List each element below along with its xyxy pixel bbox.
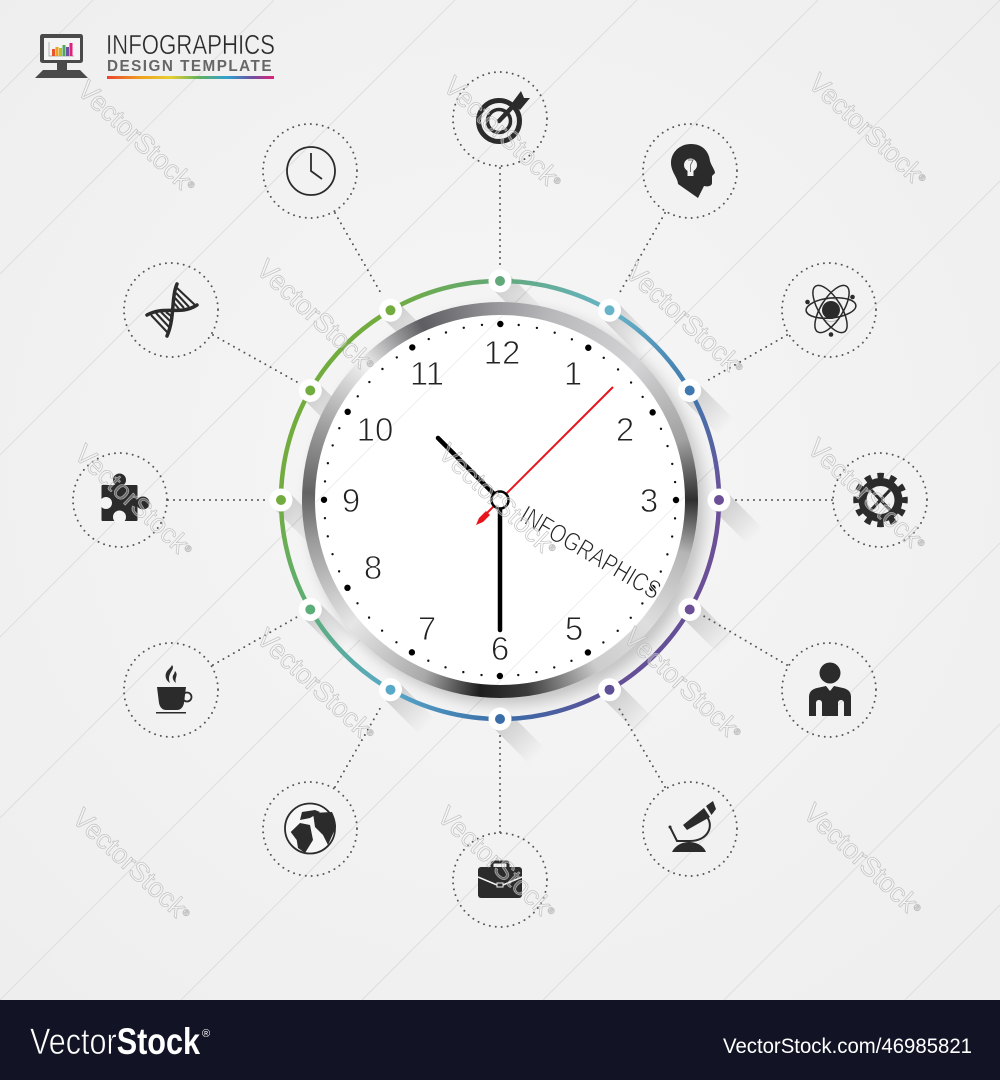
watermarks: ® [546,542,558,554]
watermarks: ® [916,172,928,184]
watermarks: VectorStock [620,257,745,377]
dotted connectors [168,168,832,832]
watermarks: ® [180,907,192,919]
clock numerals: 7 [418,610,436,647]
footer image id: VectorStock.com/46985821 [723,1035,972,1058]
clock numerals: 8 [364,549,382,586]
watermarks: ® [185,179,197,191]
clock numerals: 5 [565,610,583,647]
icon: gear [856,476,904,524]
clock numerals: 9 [342,482,360,519]
watermarks: ® [182,543,194,555]
clock numerals [342,334,658,667]
centre pin [492,492,508,508]
watermarks: ® [551,175,563,187]
hour hand [438,438,500,500]
watermarks: VectorStock [432,801,557,921]
clock numerals: 3 [640,482,658,519]
icon: globe [285,804,336,854]
clock numerals: 6 [491,630,509,667]
watermarks: VectorStock [72,75,197,195]
second hand [476,387,613,525]
icon: dna helix [147,284,197,336]
icon: businessman [809,662,851,716]
watermarks [67,68,934,928]
watermarks: VectorStock [433,438,558,558]
watermarks: ® [545,905,557,917]
icon: head with bulb [671,144,715,198]
watermarks: ® [364,358,376,370]
logo title: INFOGRAPHICS [106,29,275,60]
clock numerals: 10 [357,411,393,448]
watermarks: VectorStock [251,623,376,743]
icon: microscope [668,801,716,852]
clock face disc [315,315,685,685]
watermarks: VectorStock [802,433,927,553]
watermarks: VectorStock [67,803,192,923]
watermarks: VectorStock [251,254,376,374]
hour ticks [324,324,676,676]
icon: coffee cup [156,665,192,714]
ring nodes [270,270,730,730]
watermarks: VectorStock [798,798,923,918]
rainbow bar [107,76,274,79]
icon: wall clock [287,147,335,195]
icon: target [478,91,530,142]
icon: atom [805,280,857,338]
dial label: INFOGRAPHICS [515,499,666,605]
footer bar [0,1000,1000,1080]
icon: puzzle piece [100,474,150,524]
minute hand [498,500,502,630]
watermarks: ® [364,727,376,739]
footer logo: VectorStock [30,1021,200,1062]
watermarks: VectorStock [438,71,563,191]
clock numerals: 11 [410,355,444,392]
icon: briefcase [478,862,522,898]
clock numerals: 1 [564,355,582,392]
clock numerals: 2 [616,411,634,448]
icon: monitor with chart [35,34,88,78]
header logo [35,29,275,79]
chrome clock bezel [302,302,698,698]
coloured outer ring [281,281,719,719]
watermarks: ® [731,726,743,738]
watermarks: ® [911,902,923,914]
watermarks: VectorStock [69,439,194,559]
watermarks: VectorStock [618,622,743,742]
watermarks: ® [733,361,745,373]
clock hands [438,387,613,630]
clock dial [315,315,684,684]
registered mark: ® [202,1028,210,1040]
logo subtitle: DESIGN TEMPLATE [107,58,273,75]
dotted icon circles [73,72,927,927]
minute ticks [324,324,676,676]
clock numerals: 12 [484,334,520,371]
watermarks: ® [915,537,927,549]
watermarks: VectorStock [803,68,928,188]
node long shadows [273,273,764,764]
